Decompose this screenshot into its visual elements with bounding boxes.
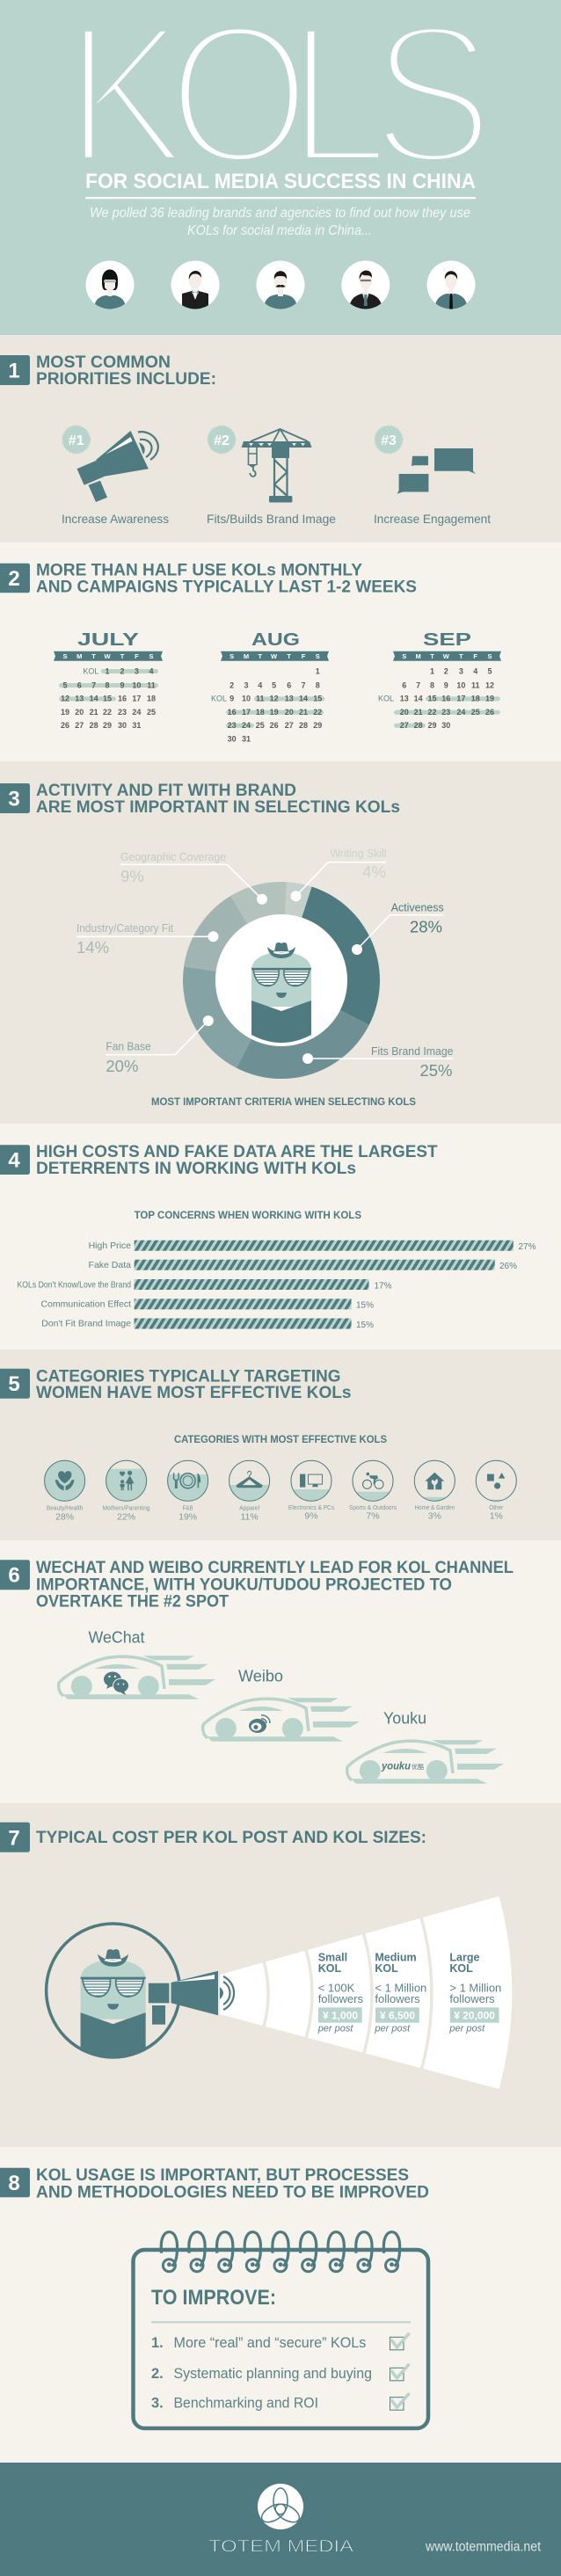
calendar: July: S xyxy=(62,652,68,660)
calendar: September: KOL xyxy=(378,695,394,703)
calendar: September: 18 xyxy=(471,695,480,703)
calendar: September: 19 xyxy=(485,695,494,703)
section 7 heading: 7 xyxy=(8,1827,20,1850)
calendar: August: F xyxy=(302,652,306,660)
segment: writing skill xyxy=(285,882,312,918)
calendar: July: 22 xyxy=(103,708,112,717)
calendar: July: 1 xyxy=(105,666,110,675)
calendar: July: 14 xyxy=(90,695,98,703)
calendar: September: 30 xyxy=(441,721,450,730)
avatar: man in teal suit with black tie xyxy=(427,260,475,309)
section 5 heading: WOMEN HAVE MOST EFFECTIVE KOLs xyxy=(36,1383,352,1402)
calendar: September: 16 xyxy=(441,695,450,703)
segment: geographic coverage xyxy=(230,882,287,924)
calendar: August: 4 xyxy=(258,680,262,689)
website: www.totemmedia.net xyxy=(425,2540,542,2555)
list item 2: 2. xyxy=(151,2366,164,2382)
section 3 panel: selection criteria xyxy=(0,761,561,1124)
channel: Youku car xyxy=(347,1710,504,1784)
calendar: August: 8 xyxy=(316,680,320,689)
priority labels: Increase Engagement xyxy=(374,512,491,526)
list item 2: Systematic planning and buying xyxy=(174,2366,372,2382)
calendar: August: T xyxy=(287,652,291,660)
section 3 heading: ACTIVITY AND FIT WITH BRAND xyxy=(36,781,296,800)
badge #3 xyxy=(375,426,403,454)
category: electronics and PCs: Electronics & PCs xyxy=(288,1503,334,1511)
category: beauty/health xyxy=(45,1460,85,1522)
calendar: July: 5 xyxy=(62,680,68,689)
tier: large KOL: ¥ 20,000 xyxy=(454,2010,495,2022)
kol character in circle xyxy=(47,1924,180,2058)
avatar: woman with glasses xyxy=(86,260,134,309)
section 6 heading: 6 xyxy=(8,1563,20,1588)
list item 1: More “real” and “secure” KOLs xyxy=(174,2335,366,2351)
category: home and garden: 3% xyxy=(428,1511,441,1522)
section 8 heading xyxy=(0,2165,429,2201)
category: beauty/health: Beauty/Health xyxy=(47,1504,83,1512)
callout: fan base: 20% xyxy=(106,1057,138,1075)
avatar: man with bow tie and vest xyxy=(171,260,220,309)
badge #3: #3 xyxy=(381,433,397,448)
calendar: July: 21 xyxy=(90,708,98,717)
calendar: August: 15 xyxy=(313,695,322,703)
calendar: August: 27 xyxy=(285,721,294,730)
section 4 heading xyxy=(0,1142,438,1178)
calendar: July: 16 xyxy=(118,695,127,703)
category: apparel xyxy=(229,1460,271,1522)
avatars row xyxy=(86,260,475,309)
bar chart: Fake Data xyxy=(89,1260,131,1270)
icon: crane xyxy=(242,429,311,503)
section 3 heading: ARE MOST IMPORTANT IN SELECTING KOLs xyxy=(36,797,400,817)
category: food and beverage: F&B xyxy=(183,1504,193,1512)
intro text: KOLs for social media in China... xyxy=(187,223,372,238)
category: apparel: 11% xyxy=(240,1511,259,1522)
channel: Youku car: Youku xyxy=(383,1710,426,1728)
list item 3 xyxy=(151,2393,410,2412)
calendar: July: 23 xyxy=(118,708,127,717)
bar chart: Don't Fit Brand Image xyxy=(41,1319,131,1329)
callout: geographic coverage: Geographic Coverage xyxy=(120,850,226,863)
channel: Weibo car xyxy=(203,1668,360,1742)
calendar: September: 23 xyxy=(441,708,450,717)
calendar: August: 14 xyxy=(299,695,308,703)
calendar: August: 1 xyxy=(316,666,320,675)
calendar: September: 26 xyxy=(485,708,494,717)
calendar: September: S xyxy=(402,652,406,660)
calendar: August: 10 xyxy=(242,695,251,703)
badge #2: #2 xyxy=(214,433,230,448)
calendar: August: 16 xyxy=(228,708,237,717)
calendar: July: S xyxy=(149,652,154,660)
list item 1 xyxy=(151,2333,410,2351)
tier: small KOL: followers xyxy=(318,1992,363,2005)
bar chart: Communication Effect xyxy=(40,1299,131,1310)
tier: small KOL: KOL xyxy=(318,1962,341,1975)
calendar: July: 28 xyxy=(90,721,98,730)
segment: fits brand image xyxy=(237,1010,369,1079)
calendar: August: M xyxy=(244,652,249,660)
calendar: August: 13 xyxy=(285,695,294,703)
callout: industry fit: Industry/Category Fit xyxy=(76,921,173,935)
category: other: Other xyxy=(489,1503,504,1511)
calendar: August: 22 xyxy=(313,708,322,717)
calendar: August: 17 xyxy=(242,708,251,717)
badge #1 xyxy=(62,426,90,454)
section 8 panel: improvements xyxy=(0,2147,561,2463)
section 7 heading xyxy=(0,1823,426,1852)
calendar: July: 12 xyxy=(61,695,69,703)
calendar: September: 1 xyxy=(430,666,434,675)
section 8 heading: 8 xyxy=(8,2172,20,2195)
calendar: July: 24 xyxy=(132,708,141,717)
notepad xyxy=(134,2232,428,2428)
calendar: September: 21 xyxy=(414,708,423,717)
calendar: July: W xyxy=(104,652,111,660)
calendar: July: F xyxy=(135,652,139,660)
calendar: September: 28 xyxy=(414,721,423,730)
tier: medium KOL: followers xyxy=(375,1992,420,2005)
section 5 panel: categories xyxy=(0,1350,561,1540)
calendar: July: KOL xyxy=(83,666,98,675)
calendar: July: 29 xyxy=(103,721,112,730)
bar chart: 17% xyxy=(375,1282,392,1291)
calendar: August: 26 xyxy=(270,721,279,730)
section 2 heading: 2 xyxy=(8,567,20,591)
tier: small KOL: Small xyxy=(318,1952,347,1964)
section 2 heading xyxy=(0,560,417,596)
spiral rings xyxy=(161,2232,400,2272)
chart caption: MOST IMPORTANT CRITERIA WHEN SELECTING KOLS xyxy=(151,1095,416,1108)
bar chart: High Price xyxy=(89,1241,131,1251)
calendar: September: 20 xyxy=(400,708,409,717)
section 7 heading: TYPICAL COST PER KOL POST AND KOL SIZES: xyxy=(36,1828,426,1847)
sound cone xyxy=(220,1874,512,2114)
calendar: September: 17 xyxy=(456,695,465,703)
badge #2 xyxy=(208,426,236,454)
callout: writing skill xyxy=(290,847,387,901)
tier: large KOL: Large xyxy=(449,1952,479,1964)
calendar: July: 26 xyxy=(61,721,69,730)
priority labels: Increase Awareness xyxy=(62,512,169,526)
calendar: September: 10 xyxy=(456,680,465,689)
calendar: July: 11 xyxy=(147,680,156,689)
calendar: July: 31 xyxy=(132,721,141,730)
callout: fits brand image: Fits Brand Image xyxy=(371,1044,454,1058)
callout: writing skill: Writing Skill xyxy=(331,847,387,860)
calendar: August: 7 xyxy=(301,680,306,689)
callout: industry fit: 14% xyxy=(76,938,109,957)
category: home and garden: Home & Garden xyxy=(414,1503,455,1511)
tier: small KOL: ¥ 1,000 xyxy=(323,2010,358,2022)
calendar: September: 4 xyxy=(473,666,477,675)
logo xyxy=(258,2484,303,2529)
section 8 heading: KOL USAGE IS IMPORTANT, BUT PROCESSES xyxy=(36,2165,409,2185)
calendar: August: 9 xyxy=(230,695,234,703)
calendar: July: 4 xyxy=(149,666,154,675)
tier: large KOL: KOL xyxy=(449,1962,473,1975)
character illustration xyxy=(251,942,311,1043)
channel: WeChat car: WeChat xyxy=(88,1629,144,1647)
calendar: July: 18 xyxy=(147,695,156,703)
calendar: August: 24 xyxy=(242,721,251,730)
calendar: August: 25 xyxy=(256,721,265,730)
calendar: September: M xyxy=(415,652,421,660)
category: other xyxy=(475,1460,517,1522)
calendar: July: 3 xyxy=(135,666,139,675)
bar chart: 15% xyxy=(356,1321,374,1330)
category: mothers/parenting: 22% xyxy=(117,1511,135,1522)
callout: fits brand image xyxy=(302,1044,454,1080)
calendar: September: W xyxy=(443,652,450,660)
footer xyxy=(0,2463,561,2576)
chart caption: TOP CONCERNS WHEN WORKING WITH KOLS xyxy=(135,1209,361,1221)
avatar: man with glasses and suit xyxy=(341,260,390,309)
section 2 heading: AND CAMPAIGNS TYPICALLY LAST 1-2 WEEKS xyxy=(36,577,417,596)
calendar: August: S xyxy=(316,652,320,660)
calendar: September: 22 xyxy=(427,708,437,717)
calendar: September: S xyxy=(487,652,492,660)
calendar: August: S xyxy=(230,652,234,660)
tier: medium KOL: KOL xyxy=(375,1962,398,1975)
callout: industry fit xyxy=(76,921,218,957)
calendar: August: KOL xyxy=(211,695,227,703)
section 4 panel: concerns xyxy=(0,1124,561,1350)
tier: medium KOL xyxy=(374,1952,426,2034)
section 1 panel: priorities xyxy=(0,335,561,542)
notepad heading: TO IMPROVE: xyxy=(151,2286,276,2310)
calendar: July: 13 xyxy=(75,695,84,703)
section 8 heading: AND METHODOLOGIES NEED TO BE IMPROVED xyxy=(36,2182,429,2201)
channel: Weibo car: Weibo xyxy=(238,1668,283,1685)
tier: small KOL: per post xyxy=(317,2024,353,2034)
bar chart: 26% xyxy=(499,1262,517,1271)
calendar: September: 25 xyxy=(471,708,480,717)
calendar: August: 19 xyxy=(270,708,279,717)
calendar: July: 15 xyxy=(103,695,112,703)
calendar: July: M xyxy=(76,652,82,660)
section 1 heading: MOST COMMON xyxy=(36,353,171,372)
category: food and beverage: 19% xyxy=(178,1511,197,1522)
calendar: July: 8 xyxy=(105,680,110,689)
section 4 heading: HIGH COSTS AND FAKE DATA ARE THE LARGEST xyxy=(36,1142,438,1161)
tier: medium KOL: ¥ 6,500 xyxy=(380,2010,415,2022)
calendar: September: 11 xyxy=(471,680,479,689)
category: food and beverage xyxy=(167,1460,209,1522)
callout: geographic coverage: 9% xyxy=(120,867,144,885)
tier: medium KOL: Medium xyxy=(375,1952,417,1964)
calendar: August: 23 xyxy=(228,721,237,730)
category: sports and outdoors xyxy=(349,1460,397,1522)
tier: small KOL xyxy=(317,1952,363,2034)
calendar: July: 19 xyxy=(61,708,69,717)
callout: geographic coverage xyxy=(120,850,267,905)
calendar: September: 29 xyxy=(427,721,437,730)
calendar: September: SEP xyxy=(423,630,471,650)
channel: WeChat car xyxy=(59,1629,215,1699)
donut chart xyxy=(183,882,380,1079)
bar chart xyxy=(18,1241,536,1330)
calendar: July: JULY xyxy=(77,630,140,650)
calendar: September: 3 xyxy=(459,666,463,675)
section 2 panel: calendars xyxy=(0,542,561,761)
calendar: August: AUG xyxy=(251,630,300,650)
badge #1: #1 xyxy=(69,433,84,448)
icon: megaphone xyxy=(77,431,158,502)
category: home and garden xyxy=(413,1460,455,1522)
calendar: August: 12 xyxy=(270,695,279,703)
section 6 heading xyxy=(0,1558,514,1611)
section 5 heading: CATEGORIES TYPICALLY TARGETING xyxy=(36,1367,341,1386)
section 3 heading xyxy=(0,781,400,817)
calendar: September: 6 xyxy=(402,680,406,689)
calendar: September: 15 xyxy=(427,695,437,703)
channel: Youku car: youku xyxy=(381,1762,411,1772)
tier: large KOL: per post xyxy=(448,2024,485,2034)
icon: megaphone xyxy=(149,1971,234,2025)
calendar: August: 3 xyxy=(244,680,249,689)
section 5 heading xyxy=(0,1367,352,1402)
segment: activeness xyxy=(302,886,380,1025)
calendar: August: 6 xyxy=(287,680,291,689)
calendar: July: 30 xyxy=(118,721,127,730)
calendar: August: 5 xyxy=(272,680,276,689)
subtitle: FOR SOCIAL MEDIA SUCCESS IN CHINA xyxy=(85,170,476,193)
category: sports and outdoors: 7% xyxy=(366,1511,380,1522)
brand name: TOTEM MEDIA xyxy=(208,2537,353,2556)
calendar: August: 31 xyxy=(242,734,251,743)
calendar: July: 7 xyxy=(91,680,96,689)
calendar: August: 29 xyxy=(313,721,322,730)
calendar: September: 8 xyxy=(430,680,434,689)
category: mothers/parenting: Mothers/Parenting xyxy=(103,1504,150,1512)
category: sports and outdoors: Sports & Outdoors xyxy=(349,1503,397,1511)
callout: activeness xyxy=(352,901,444,955)
calendar: September: F xyxy=(473,652,477,660)
section 3 heading: 3 xyxy=(8,788,20,811)
calendar: July xyxy=(54,630,163,730)
bar chart: 15% xyxy=(356,1301,374,1310)
section 1 heading: 1 xyxy=(8,359,20,383)
section 6 heading: IMPORTANCE, WITH YOUKU/TUDOU PROJECTED TO xyxy=(36,1575,452,1594)
calendar: July: 10 xyxy=(132,680,141,689)
list item 3: 3. xyxy=(151,2396,164,2412)
segment: industry fit xyxy=(184,896,247,971)
category: electronics and PCs: 9% xyxy=(304,1511,318,1522)
calendar: August: 11 xyxy=(256,695,265,703)
callout: writing skill: 4% xyxy=(362,862,386,881)
intro text xyxy=(90,206,470,238)
icon: chat bubbles xyxy=(397,448,476,494)
calendar: August: W xyxy=(271,652,278,660)
calendar: September: 27 xyxy=(400,721,409,730)
calendar: July: 20 xyxy=(75,708,84,717)
calendar: September: 14 xyxy=(414,695,423,703)
tier: medium KOL: per post xyxy=(374,2024,411,2034)
section 6 heading: WECHAT AND WEIBO CURRENTLY LEAD FOR KOL CHANNEL xyxy=(36,1558,514,1577)
section 6 heading: OVERTAKE THE #2 SPOT xyxy=(36,1591,229,1611)
calendar: September: 7 xyxy=(416,680,420,689)
category: electronics and PCs xyxy=(288,1460,334,1522)
calendar: July: 9 xyxy=(120,680,125,689)
priority labels: Fits/Builds Brand Image xyxy=(207,512,336,526)
calendar: September: 24 xyxy=(456,708,465,717)
calendar: August: 28 xyxy=(299,721,308,730)
calendar: August: 18 xyxy=(256,708,265,717)
chart caption: CATEGORIES WITH MOST EFFECTIVE KOLS xyxy=(174,1433,387,1445)
category: other: 1% xyxy=(490,1511,503,1522)
calendar: August: 30 xyxy=(228,734,237,743)
tier: small KOL: < 100K xyxy=(318,1982,355,1995)
calendar: August: 21 xyxy=(299,708,308,717)
callout: activeness: Activeness xyxy=(391,901,444,914)
list item 3: Benchmarking and ROI xyxy=(174,2396,318,2412)
section 1 heading: PRIORITIES INCLUDE: xyxy=(36,369,216,389)
calendar: July: 17 xyxy=(132,695,141,703)
intro text: We polled 36 leading brands and agencies to find out how they use xyxy=(90,206,470,221)
header panel xyxy=(0,0,561,335)
list item 1: 1. xyxy=(151,2335,164,2351)
calendar: September: 13 xyxy=(400,695,409,703)
section 2 heading: MORE THAN HALF USE KOLs MONTHLY xyxy=(36,560,362,579)
section 5 heading: 5 xyxy=(8,1372,20,1396)
calendar: July: 25 xyxy=(147,708,156,717)
section 4 heading: DETERRENTS IN WORKING WITH KOLs xyxy=(36,1159,356,1178)
priority labels xyxy=(62,512,491,526)
calendar: September: T xyxy=(459,652,463,660)
section 7 panel: cost per post xyxy=(0,1803,561,2147)
callout: activeness: 28% xyxy=(410,918,442,936)
calendar: July: 27 xyxy=(75,721,84,730)
section 6 panel: channels xyxy=(0,1540,561,1803)
calendar: September: T xyxy=(430,652,434,660)
calendar: August: 20 xyxy=(285,708,294,717)
calendar: September xyxy=(378,630,501,730)
channel: Youku car: 优酷 xyxy=(412,1763,424,1771)
calendar: August: 2 xyxy=(230,680,234,689)
calendar: September: 2 xyxy=(444,666,448,675)
tier: medium KOL: < 1 Million xyxy=(375,1982,426,1995)
category: apparel: Apparel xyxy=(239,1504,259,1512)
category: mothers/parenting xyxy=(103,1460,150,1522)
tier: large KOL: followers xyxy=(449,1992,495,2005)
calendar: July: 2 xyxy=(120,666,125,675)
tier: large KOL xyxy=(448,1952,501,2034)
callout: fan base: Fan Base xyxy=(106,1040,151,1053)
tier: large KOL: > 1 Million xyxy=(449,1982,501,1995)
segment: fan base xyxy=(183,966,251,1068)
calendar: August: T xyxy=(259,652,263,660)
calendar: September: 5 xyxy=(487,666,492,675)
section 4 heading: 4 xyxy=(8,1148,20,1173)
category: beauty/health: 28% xyxy=(55,1511,74,1522)
bar chart: 27% xyxy=(519,1242,536,1252)
callout: fits brand image: 25% xyxy=(419,1061,452,1080)
section 1 heading xyxy=(0,353,216,389)
calendar: September: 9 xyxy=(444,680,448,689)
bar chart: KOLs Don't Know/Love the Brand xyxy=(18,1280,131,1291)
avatar: man with moustache xyxy=(257,260,304,309)
calendar: July: 6 xyxy=(77,680,82,689)
calendar: July: T xyxy=(91,652,96,660)
calendar: August xyxy=(211,630,329,743)
calendar: July: T xyxy=(120,652,125,660)
callout: fan base xyxy=(106,1015,214,1075)
calendar: September: 12 xyxy=(485,680,494,689)
